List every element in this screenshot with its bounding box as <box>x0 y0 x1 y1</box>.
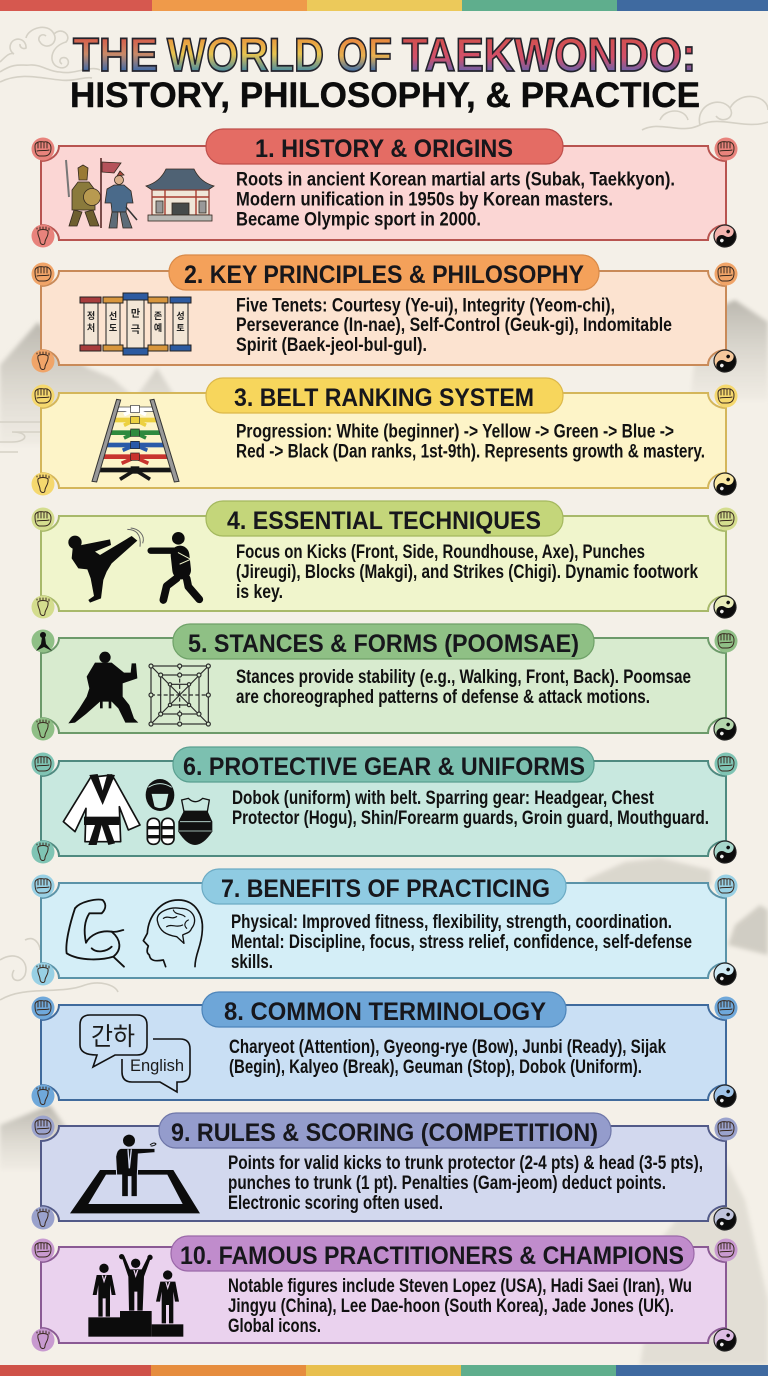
bottom rainbow bar <box>0 1365 768 1376</box>
column labels: 예 <box>154 322 162 333</box>
pill heading 8: 8. COMMON TERMINOLOGY <box>224 998 546 1026</box>
pill heading 7: 7. BENEFITS OF PRACTICING <box>221 875 550 903</box>
icon: speech bubbles <box>80 1015 190 1092</box>
benefits text <box>231 912 692 973</box>
icon: chest protector <box>178 798 212 845</box>
practitioners text: Global icons. <box>228 1316 321 1337</box>
corner icons <box>32 630 740 744</box>
panel 3: belt ranking <box>32 378 740 499</box>
pill heading 3: 3. BELT RANKING SYSTEM <box>234 384 534 412</box>
icon: kicking figure <box>68 528 143 603</box>
corner icons <box>32 508 740 622</box>
title line 1: WORLD <box>167 28 324 81</box>
corner icons <box>32 874 740 989</box>
pill heading 4: 4. ESSENTIAL TECHNIQUES <box>227 507 541 535</box>
gear text: Dobok (uniform) with belt. Sparring gear: Headgear, Chest <box>232 788 655 809</box>
stances text <box>236 667 691 708</box>
icon: flexed arm <box>66 900 124 967</box>
pill heading 5: 5. STANCES & FORMS (POOMSAE) <box>188 630 579 658</box>
column labels: 존 <box>154 311 162 321</box>
techniques text: is key. <box>236 582 283 603</box>
history text <box>236 170 675 230</box>
terminology text: (Begin), Kalyeo (Break), Geuman (Stop), Dobok (Uniform). <box>229 1057 642 1078</box>
pill heading 1 <box>206 129 563 164</box>
icon: pavilion <box>146 169 214 221</box>
icon: head with brain <box>143 900 202 967</box>
title line 1 <box>73 28 696 81</box>
title line 1: THE <box>73 28 158 81</box>
icon: speech bubbles: 간하 <box>91 1017 135 1053</box>
panel 6: protective gear <box>32 747 740 867</box>
pill heading 9: 9. RULES & SCORING (COMPETITION) <box>171 1119 598 1147</box>
panel 9: rules and scoring <box>32 1113 740 1234</box>
principles text: Spirit (Baek-jeol-bul-gul). <box>236 335 427 356</box>
history text: Roots in ancient Korean martial arts (Subak, Taekkyon). <box>236 170 675 190</box>
icon: speech bubbles: English <box>130 1056 184 1075</box>
panel 8: terminology <box>32 992 740 1111</box>
rules text <box>228 1153 703 1214</box>
column labels: 만 <box>131 308 140 320</box>
techniques text <box>236 542 698 603</box>
corner icons <box>32 996 740 1111</box>
corner icons <box>32 1116 740 1234</box>
pill heading 1: 1. HISTORY & ORIGINS <box>255 135 513 163</box>
benefits text: Physical: Improved fitness, flexibility, strength, coordination. <box>231 912 672 933</box>
corner icons <box>32 1238 740 1355</box>
icon: dobok uniform <box>63 774 140 845</box>
corner icons <box>32 138 740 251</box>
panel 10: famous practitioners <box>32 1236 740 1355</box>
principles text: Perseverance (In-nae), Self-Control (Geuk-gi), Indomitable <box>236 315 672 336</box>
column labels: 정 <box>87 310 95 321</box>
pill heading 10: 10. FAMOUS PRACTITIONERS & CHAMPIONS <box>180 1242 684 1270</box>
panel 1: history and origins <box>32 129 740 251</box>
top rainbow bar <box>0 0 768 11</box>
title <box>70 28 700 115</box>
panel 5: stances and forms <box>32 624 740 744</box>
corner icons <box>32 752 740 867</box>
pill heading 6: 6. PROTECTIVE GEAR & UNIFORMS <box>183 753 585 781</box>
panel 4: essential techniques <box>32 501 740 622</box>
principles text: Five Tenets: Courtesy (Ye-ui), Integrity (Yeom-chi), <box>236 296 615 316</box>
icon: five tenet columns <box>80 293 191 355</box>
panel 2: key principles <box>32 255 740 376</box>
belt text <box>236 422 705 462</box>
belt text: Progression: White (beginner) -> Yellow -> Green -> Blue -> <box>236 422 674 442</box>
icon: punching figure <box>151 532 199 600</box>
title line 1: OF <box>337 28 392 81</box>
terminology text: Charyeot (Attention), Gyeong-rye (Bow), Junbi (Ready), Sijak <box>229 1037 666 1058</box>
icon: poomsae diagram <box>149 664 210 726</box>
icon: headgear and guards <box>146 779 174 844</box>
stances text: are choreographed patterns of defense & attack motions. <box>236 687 650 708</box>
rules text: Electronic scoring often used. <box>228 1193 443 1214</box>
column labels: 토 <box>176 323 185 333</box>
history text: Became Olympic sport in 2000. <box>236 210 481 230</box>
pill heading 2: 2. KEY PRINCIPLES & PHILOSOPHY <box>184 261 584 289</box>
corner icons <box>32 262 740 376</box>
rules text: punches to trunk (1 pt). Penalties (Gam-jeom) deduct points. <box>228 1173 666 1194</box>
icon: belt ladder <box>92 399 179 482</box>
column labels: 선 <box>109 310 117 321</box>
techniques text: Focus on Kicks (Front, Side, Roundhouse, Axe), Punches <box>236 542 645 563</box>
column labels: 처 <box>87 322 95 333</box>
icon: warriors <box>66 158 137 228</box>
column labels <box>87 308 185 336</box>
corner icons <box>32 384 740 499</box>
icon: stance silhouette <box>68 652 138 723</box>
title line 2: HISTORY, PHILOSOPHY, & PRACTICE <box>70 76 700 115</box>
practitioners text <box>228 1276 692 1337</box>
principles text <box>236 296 672 356</box>
column labels: 성 <box>176 311 185 321</box>
benefits text: skills. <box>231 952 273 973</box>
terminology text <box>229 1037 666 1078</box>
icon: referee on mat <box>70 1135 200 1213</box>
gear text <box>232 788 709 829</box>
column labels: 극 <box>131 324 140 336</box>
title line 1: TAEKWONDO: <box>402 28 696 81</box>
history text: Modern unification in 1950s by Korean masters. <box>236 190 613 210</box>
panel 7: benefits <box>32 869 740 989</box>
column labels: 도 <box>109 323 117 333</box>
icon: medal podium <box>88 1254 183 1337</box>
